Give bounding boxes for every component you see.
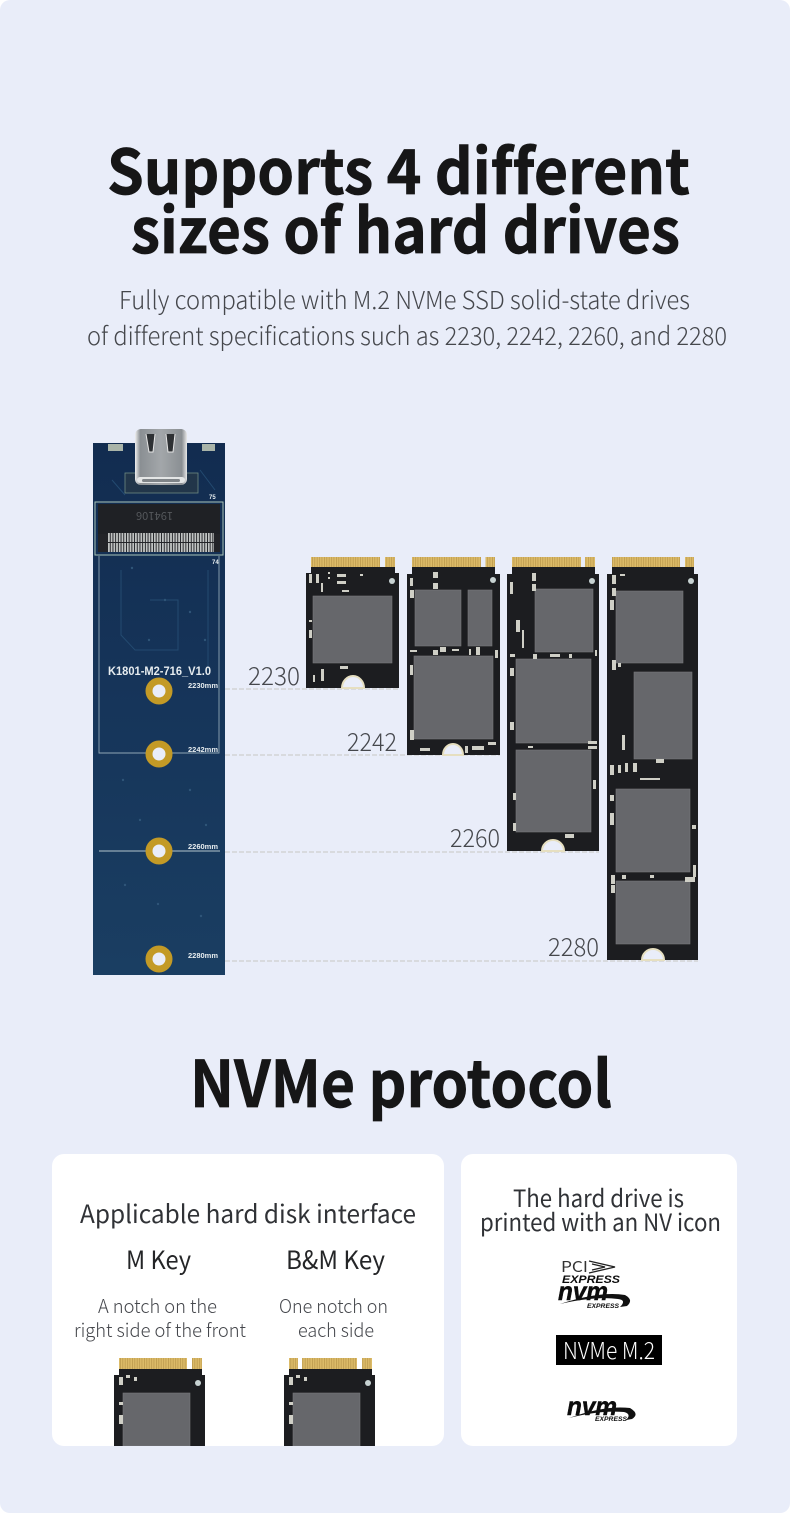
board traces: [112, 470, 215, 670]
USB-C connector: [125, 429, 198, 493]
logo: NVM Express: EXPRESS: [595, 1416, 628, 1423]
board silkscreen labels: [108, 495, 219, 960]
SSD 2280: [607, 557, 698, 960]
board silkscreen labels: 2260mm: [188, 844, 218, 851]
title: [107, 122, 690, 271]
B&M Key drive: [284, 1358, 375, 1446]
B&M Key column: [279, 1241, 388, 1446]
B&M Key column: each side: [298, 1316, 374, 1343]
logo: PCI Express NVM Express: EXPRESS: [587, 1303, 620, 1310]
M Key column: [74, 1241, 246, 1446]
board silkscreen labels: K1801-M2-716_V1.0: [108, 666, 211, 678]
size labels: 2242: [347, 723, 397, 759]
size labels: 2260: [450, 819, 500, 855]
mounting holes: [149, 681, 169, 969]
subtitle: Fully compatible with M.2 NVMe SSD solid-state drives: [119, 281, 690, 317]
logo: PCI Express NVM Express: PCI: [561, 1256, 588, 1277]
M.2 slot: [95, 502, 223, 555]
B&M Key column: B&M Key: [286, 1241, 385, 1277]
logo: PCI Express NVM Express: EXPRESS: [562, 1274, 621, 1286]
board silkscreen labels: 2280mm: [188, 953, 218, 960]
SSD 2230: [306, 557, 399, 688]
alignment guide lines: [225, 689, 698, 961]
SSD 2260: [507, 557, 599, 851]
board silkscreen labels: 2230mm: [188, 683, 218, 690]
board silkscreen labels: 75: [209, 495, 216, 501]
status LEDs: [108, 444, 215, 451]
heading: NVMe protocol: NVMe protocol: [190, 1034, 612, 1126]
B&M Key column: One notch on: [279, 1292, 388, 1319]
M.2 enclosure circuit board: [93, 429, 225, 975]
size labels: [248, 657, 599, 964]
M Key column: A notch on the: [98, 1292, 217, 1319]
panel: hard disk interface: [52, 1154, 444, 1446]
subtitle: [87, 281, 727, 353]
board silkscreen labels: 74: [212, 560, 219, 566]
M Key column: right side of the front: [74, 1316, 246, 1343]
logo: NVM Express: nvm: [567, 1391, 617, 1421]
logo: NVMe M.2 badge: NVMe M.2: [563, 1332, 655, 1366]
panel: NV icon: [461, 1154, 737, 1446]
size labels: 2280: [548, 928, 599, 964]
logo: PCI Express NVM Express: [558, 1256, 630, 1310]
panel heading: The hard drive is: [513, 1179, 684, 1214]
title: sizes of hard drives: [131, 181, 680, 271]
SSD 2242: [407, 557, 500, 755]
size labels: 2230: [248, 657, 300, 693]
panel heading: Applicable hard disk interface: [80, 1195, 416, 1231]
M Key drive: [114, 1358, 205, 1446]
panel heading: printed with an NV icon: [480, 1203, 721, 1238]
M.2 slot: 194106: [136, 508, 173, 524]
title: Supports 4 different: [107, 122, 690, 212]
board vias: [122, 567, 207, 917]
board silkscreen labels: 2242mm: [188, 747, 218, 754]
M Key column: M Key: [126, 1241, 191, 1277]
logo: PCI Express NVM Express: nvm: [558, 1276, 608, 1306]
panel heading: [480, 1179, 721, 1238]
subtitle: of different specifications such as 2230, 2242, 2260, and 2280: [87, 317, 727, 353]
